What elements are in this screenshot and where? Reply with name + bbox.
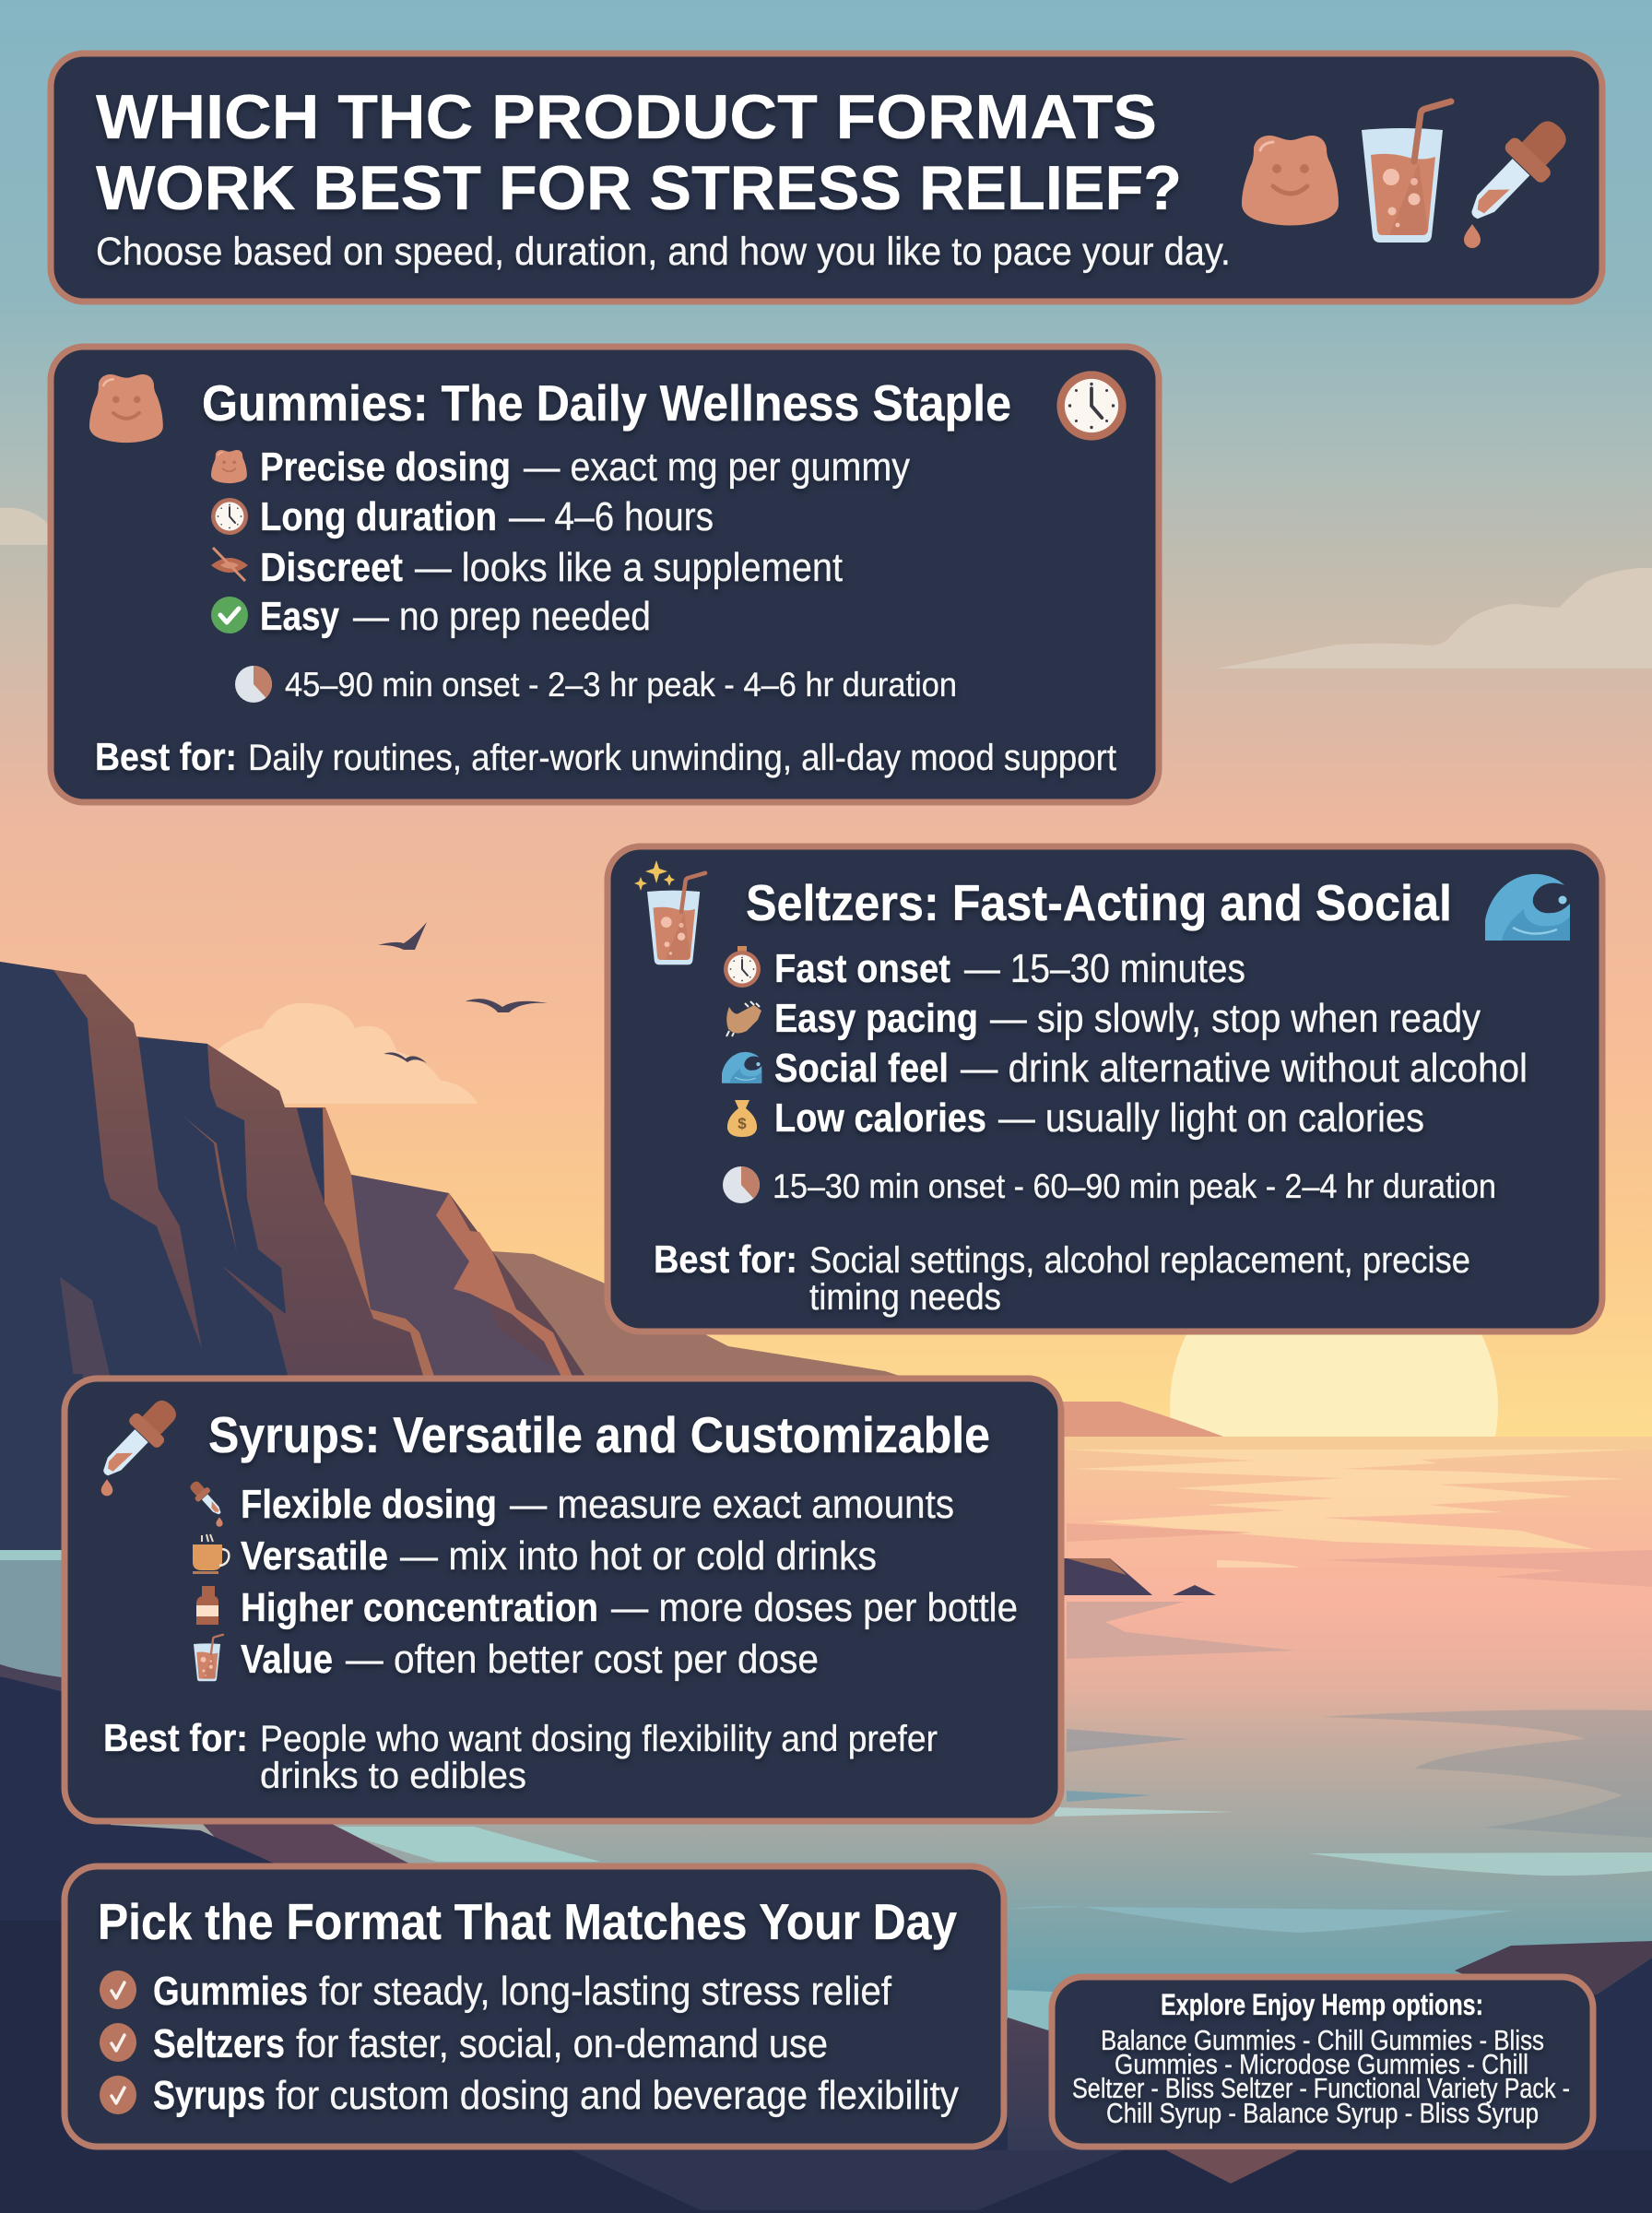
list: gummies benefits: Discreet <box>260 545 403 590</box>
list: syrups benefits: — mix into hot or cold drinks <box>400 1533 877 1579</box>
panel: gummies <box>51 347 1159 802</box>
list: seltzers benefits: — 15–30 minutes <box>964 946 1245 991</box>
heading: seltzers: Seltzers: Fast-Acting and Social <box>746 874 1452 931</box>
product list <box>1072 2024 1570 2129</box>
list: syrups benefits <box>186 1477 1018 1682</box>
title: WHICH THC PRODUCT FORMATS <box>96 82 1157 152</box>
icon: seltzer glass <box>1362 101 1451 243</box>
list: seltzers benefits <box>722 946 1528 1141</box>
list: format summary: Gummies <box>153 1969 308 2014</box>
list: gummies benefits: Easy <box>260 594 339 639</box>
list: seltzers benefits: — sip slowly, stop when ready <box>990 996 1481 1041</box>
list: format summary: for steady, long-lasting stress relief <box>319 1969 892 2014</box>
list: seltzers benefits: Fast onset <box>774 946 950 991</box>
list: gummies benefits: — looks like a supplement <box>415 545 843 590</box>
background: birds <box>378 922 548 1063</box>
list: seltzers benefits: — usually light on calories <box>998 1095 1424 1141</box>
list: seltzers benefits: Low calories <box>774 1095 986 1141</box>
icon: wave <box>1485 874 1570 941</box>
icon: seltzer glass with sparkles <box>634 860 705 964</box>
list: syrups benefits: Flexible dosing <box>241 1482 497 1527</box>
icon: gummy <box>1242 136 1339 225</box>
list: format summary: for faster, social, on-demand use <box>296 2021 828 2066</box>
list: format summary: Seltzers <box>153 2021 285 2066</box>
list: syrups benefits: Higher concentration <box>241 1585 598 1630</box>
panel: seltzers <box>608 846 1602 1331</box>
subtitle: Choose based on speed, duration, and how you like to pace your day. <box>96 230 1231 274</box>
list: gummies benefits: — 4–6 hours <box>509 494 714 539</box>
heading: syrups: Syrups: Versatile and Customizable <box>208 1406 990 1463</box>
background: sun <box>1170 1242 1498 1570</box>
product list: Balance Gummies - Chill Gummies - Bliss <box>1101 2024 1544 2056</box>
best for: gummies: Best for: <box>95 735 237 778</box>
list: format summary <box>100 1969 959 2118</box>
heading: gummies: Gummies: The Daily Wellness Staple <box>202 374 1011 432</box>
list: format summary: Syrups <box>153 2073 266 2118</box>
background: sunset sky <box>0 0 1652 1475</box>
title <box>96 82 1182 223</box>
best for: syrups: Best for: <box>103 1716 248 1759</box>
list: format summary: for custom dosing and beverage flexibility <box>276 2073 959 2118</box>
icon: gummy <box>89 374 163 443</box>
best for: seltzers: timing needs <box>809 1277 1001 1318</box>
best for: seltzers: Social settings, alcohol replacement, precise <box>809 1240 1470 1281</box>
timeline: gummies: 45–90 min onset - 2–3 hr peak - 4–6 hr duration <box>285 666 957 704</box>
product list: Chill Syrup - Balance Syrup - Bliss Syrup <box>1106 2097 1539 2129</box>
title: WORK BEST FOR STRESS RELIEF? <box>96 153 1182 223</box>
timeline: seltzers: 15–30 min onset - 60–90 min peak - 2–4 hr duration <box>773 1167 1496 1205</box>
background: clouds <box>0 508 1652 1104</box>
list: syrups benefits: Value <box>241 1637 333 1682</box>
list: seltzers benefits: Easy pacing <box>774 996 978 1041</box>
list: gummies benefits: — no prep needed <box>353 594 651 639</box>
list: syrups benefits: — more doses per bottle <box>611 1585 1018 1630</box>
list: seltzers benefits: — drink alternative without alcohol <box>961 1046 1528 1091</box>
background: sea reflections and waves <box>1008 1437 1652 2030</box>
background: foreground land <box>0 1550 1652 2213</box>
heading: pick the format: Pick the Format That Matches Your Day <box>98 1893 957 1950</box>
panel: pick the format <box>65 1866 1004 2147</box>
list: seltzers benefits: $ <box>738 1115 747 1132</box>
list: seltzers benefits: Social feel <box>774 1046 949 1091</box>
product list: Gummies - Microdose Gummies - Chill <box>1115 2048 1528 2080</box>
background: cliff <box>0 962 590 1551</box>
panel: header <box>51 53 1602 302</box>
background: distant headland <box>1032 1402 1223 1437</box>
heading: explore: Explore Enjoy Hemp options: <box>1161 1988 1483 2021</box>
best for: syrups: People who want dosing flexibility and prefer <box>260 1719 938 1759</box>
icon: dropper <box>90 1391 186 1496</box>
list: syrups benefits: — measure exact amounts <box>510 1482 954 1527</box>
list: syrups benefits: Versatile <box>241 1533 388 1579</box>
best for: seltzers <box>654 1237 1470 1318</box>
list: gummies benefits: Long duration <box>260 494 497 539</box>
list: gummies benefits: Precise dosing <box>260 444 511 490</box>
best for: syrups <box>103 1716 938 1796</box>
panel: syrups <box>65 1379 1061 1821</box>
best for: seltzers: Best for: <box>654 1237 797 1281</box>
best for: gummies: Daily routines, after-work unwinding, all-day mood support <box>248 738 1116 778</box>
list: gummies benefits <box>211 444 910 639</box>
background: far cliff <box>277 1251 922 1383</box>
list: syrups benefits: — often better cost per dose <box>346 1637 819 1682</box>
background: sea <box>0 1437 1652 2045</box>
panel: explore options <box>1052 1977 1593 2147</box>
list: gummies benefits: — exact mg per gummy <box>524 444 910 490</box>
best for: syrups: drinks to edibles <box>260 1756 526 1796</box>
icon: syrup dropper <box>1455 109 1579 248</box>
icon: clock <box>1056 371 1127 441</box>
background: small rocks <box>1060 1558 1216 1595</box>
